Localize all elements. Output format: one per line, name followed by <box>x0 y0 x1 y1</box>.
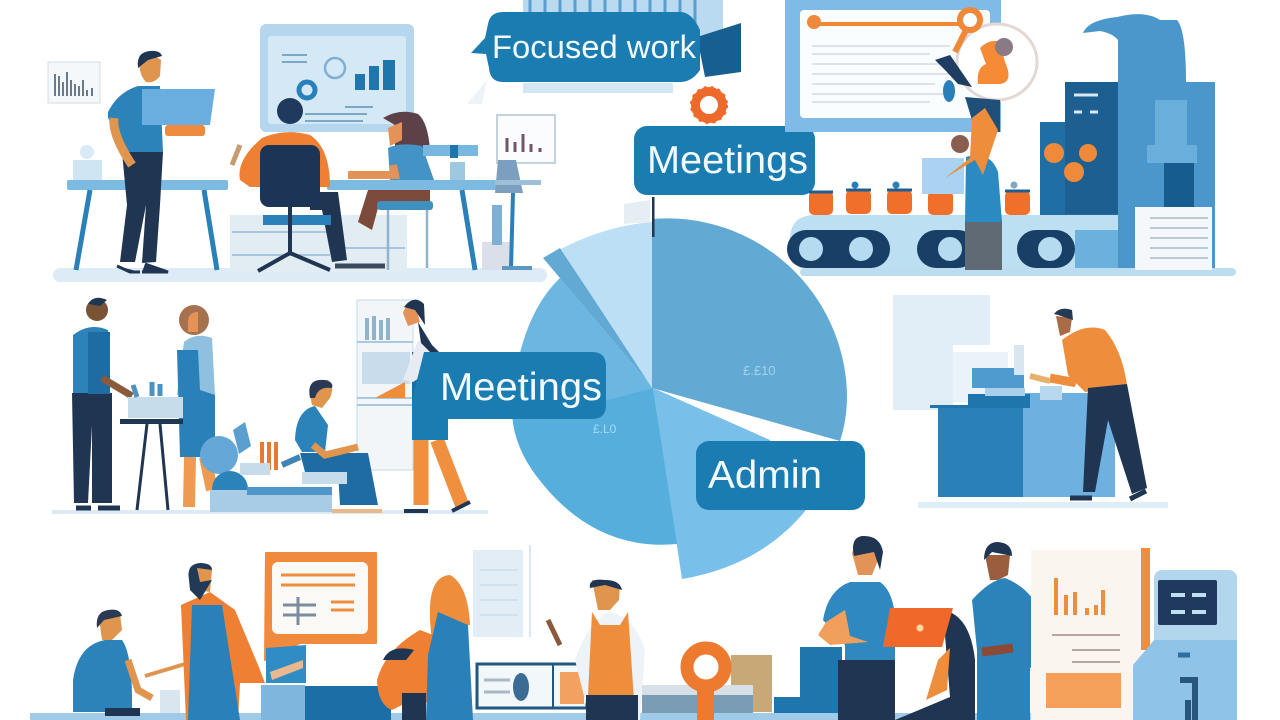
scene: screen behind focused work label <box>467 0 741 104</box>
seated man left <box>73 610 185 713</box>
woman in blue with laptop <box>818 536 895 720</box>
label: Meetings top <box>634 126 815 195</box>
man in blue <box>72 298 132 508</box>
work table and robot <box>120 382 332 512</box>
orange pots <box>809 182 1113 215</box>
wall monitor <box>260 24 414 132</box>
orange gear on pillar <box>687 648 725 720</box>
man with orange apron <box>548 580 645 720</box>
label: Admin <box>696 441 865 510</box>
conveyor belt <box>787 215 1137 268</box>
scene: top-right factory line <box>785 0 1236 276</box>
seated woman <box>348 112 478 270</box>
pie value text: £.£10 <box>743 363 776 378</box>
label: Focused work: Focused work <box>492 29 697 65</box>
orange laptop <box>883 608 953 647</box>
label: Admin: Admin <box>708 454 822 497</box>
label: Meetings left <box>412 352 606 440</box>
pie chart <box>511 197 847 579</box>
crates <box>642 647 842 713</box>
easel chart and stand <box>482 115 555 270</box>
chart panel <box>1031 548 1150 720</box>
pie slice: lower left <box>512 388 677 545</box>
seated dark-haired woman <box>895 610 975 720</box>
magnifier with orange figure <box>935 10 1037 102</box>
bearded man with apron <box>181 563 265 720</box>
scene: top-left office <box>48 24 555 282</box>
woman with orange hair <box>377 575 473 720</box>
seated man <box>282 380 382 511</box>
pie slice: left <box>511 278 653 410</box>
icon: orange gear <box>692 88 726 122</box>
desks <box>67 180 497 272</box>
woman at conveyor <box>922 97 1002 270</box>
orange sign board <box>265 553 376 660</box>
presentation screen <box>785 0 1001 132</box>
control cabinets <box>1040 14 1215 270</box>
man in blue coveralls <box>972 542 1050 720</box>
scene: middle-right workstation <box>893 295 1168 508</box>
man in orange <box>1030 309 1147 499</box>
pale jar on desk <box>73 145 102 180</box>
dashboard monitor <box>477 664 587 708</box>
document stack <box>893 295 1008 410</box>
pie slice: narrow wedge <box>543 248 653 388</box>
pie slice: lower right <box>653 388 806 579</box>
label: Focused work <box>471 12 700 82</box>
person in orange on chair <box>232 98 385 271</box>
scene: middle-left team <box>52 298 488 514</box>
woman in apron <box>177 305 215 507</box>
small wall chart <box>48 62 100 103</box>
pie slice: top pale <box>561 222 652 388</box>
label: Meetings left: Meetings <box>440 366 602 409</box>
label: Meetings top: Meetings <box>647 139 808 182</box>
pie chart: £.L0 <box>593 422 617 436</box>
shelf <box>357 300 413 470</box>
pale wall chart <box>473 545 530 637</box>
blue workbench <box>930 345 1115 497</box>
scene: bottom row <box>30 536 1237 720</box>
woman with clipboard <box>403 300 470 511</box>
machine boxes <box>261 645 391 720</box>
kiosk machine <box>1133 570 1237 720</box>
person with laptop <box>108 51 215 272</box>
pie slice: large upper right <box>652 218 847 441</box>
